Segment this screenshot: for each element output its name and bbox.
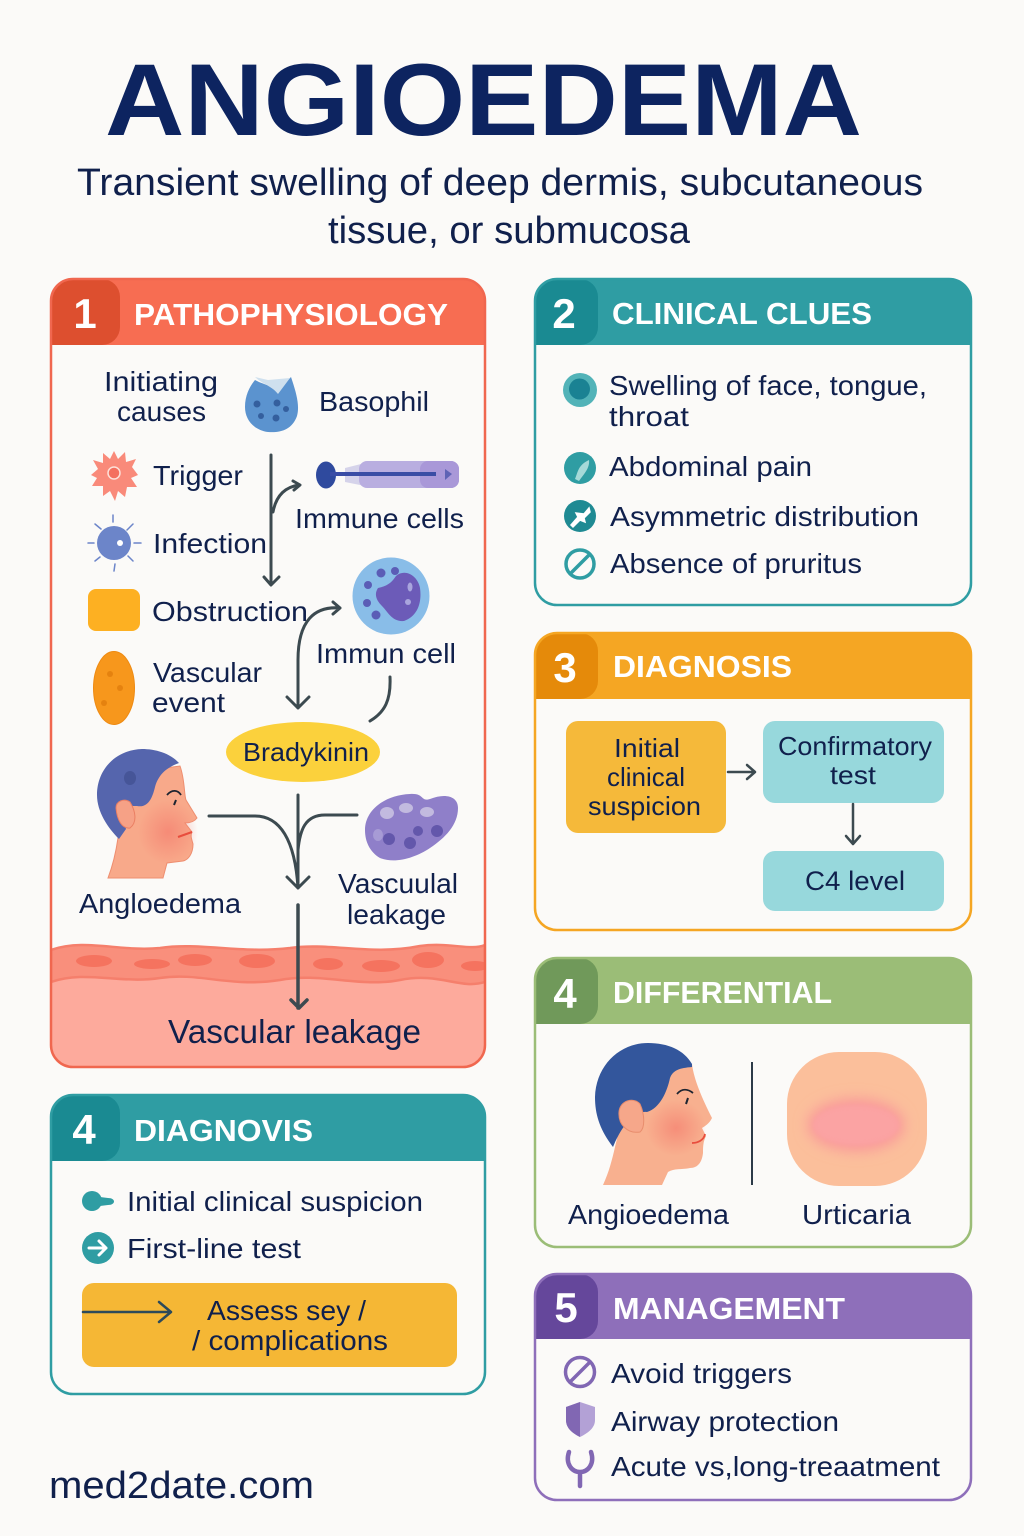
label: trigger: Trigger [153, 460, 243, 491]
label: vascular event: event [152, 687, 225, 718]
title: ANGIOEDEMA [105, 43, 862, 157]
arrow: to c4 level [846, 804, 860, 844]
label: initiating causes [104, 366, 218, 427]
arrow: to confirmatory test [728, 765, 755, 779]
subtitle [77, 162, 923, 252]
arrow: to immune cells [273, 481, 300, 512]
label: infection: Infection [153, 528, 267, 559]
icon: basophil [245, 377, 298, 432]
icon: swelling [563, 373, 597, 407]
label: vascuulal leakage: leakage [347, 899, 446, 930]
panel heading: DIFFERENTIAL [613, 975, 832, 1010]
box: initial clinical suspicion [566, 721, 726, 833]
panel heading: CLINICAL CLUES [612, 296, 872, 331]
clue: abdominal pain: Abdominal pain [609, 451, 812, 482]
clue: absence of pruritus: Absence of pruritus [610, 548, 862, 579]
box: confirmatory test: Confirmatory [778, 731, 932, 761]
panel: diagnosis flow [515, 633, 971, 930]
clue: swelling: Swelling of face, tongue, [609, 370, 927, 401]
label: initiating causes: Initiating [104, 366, 218, 397]
icon: avoid [566, 1358, 594, 1386]
clue: swelling: throat [609, 401, 689, 432]
label: urticaria: Urticaria [802, 1199, 911, 1230]
icon: vascular event [94, 652, 134, 724]
bradykinin [226, 722, 380, 782]
icon: airway [568, 1452, 592, 1486]
box: confirmatory test: test [830, 760, 877, 790]
panel: clinical clues [515, 279, 971, 605]
panel number: 1 [73, 290, 97, 337]
box: initial clinical suspicion: clinical [607, 762, 685, 792]
icon: angioedema profile [595, 1043, 712, 1185]
box: c4 level [763, 851, 944, 911]
footer: website: med2date.com [49, 1465, 314, 1507]
panel number: 5 [554, 1284, 578, 1331]
icon: immune cell syringe [316, 461, 459, 488]
icon: absence of pruritus [566, 550, 594, 578]
arrow: to immun cell and bradykinin [287, 602, 340, 708]
box: assess severity: / complications [192, 1325, 388, 1356]
panel number: 4 [72, 1106, 96, 1153]
panel number: 4 [553, 970, 577, 1017]
box: confirmatory test [763, 721, 944, 803]
panel heading: MANAGEMENT [613, 1291, 845, 1326]
label: vascuulal leakage: Vascuulal [338, 868, 458, 899]
divider [751, 1062, 753, 1185]
icon: immune cell [352, 558, 430, 634]
label: initiating causes: causes [117, 396, 206, 427]
arrow: immun cell to bradykinin [370, 677, 390, 721]
item: initial clinical suspicion: Initial clinical suspicion [127, 1186, 423, 1217]
label: vascuulal leakage [338, 868, 458, 930]
label: obstruction: Obstruction [152, 596, 308, 627]
label: immune cells: Immune cells [295, 503, 464, 534]
icon: urticaria skin [787, 1052, 927, 1186]
icon: asymmetric distribution [564, 500, 596, 532]
panel heading: PATHOPHYSIOLOGY [134, 297, 448, 332]
label: basophil: Basophil [319, 386, 429, 417]
box: initial clinical suspicion: Initial [614, 733, 680, 763]
label: vascular event: Vascular [153, 657, 262, 688]
panel number: 3 [553, 644, 577, 691]
icon: first-line test [82, 1232, 114, 1264]
label: immun cell: Immun cell [316, 638, 456, 669]
icon: trigger [91, 451, 138, 501]
box: assess severity: Assess sey / [207, 1295, 366, 1326]
icon: abdominal pain [564, 452, 596, 484]
icon: suspicion [82, 1191, 114, 1211]
clue: swelling [609, 370, 927, 432]
panel heading: DIAGNOSIS [613, 649, 792, 684]
subtitle: tissue, or submucosa [328, 210, 691, 252]
label: vascular event [152, 657, 262, 718]
panel: pathophysiology [30, 279, 489, 1067]
arrow: merging flow [209, 795, 357, 888]
label: angioedema: Angioedema [568, 1199, 729, 1230]
clue: asymmetric distribution: Asymmetric distribution [610, 501, 919, 532]
icon: shield [566, 1402, 595, 1437]
subtitle: Transient swelling of deep dermis, subcutaneous [77, 162, 923, 204]
item: acute vs long treatment: Acute vs,long-treaatment [611, 1451, 940, 1482]
arrow: trigger to obstruction [264, 455, 279, 585]
box: assess severity [82, 1283, 457, 1367]
label: angloedema: Angloedema [79, 888, 241, 919]
label: vascular leakage: Vascular leakage [168, 1013, 421, 1050]
icon: head with angioedema [97, 749, 198, 878]
panel: management [515, 1274, 971, 1500]
panel: differential [515, 958, 971, 1247]
icon: obstruction [88, 589, 140, 631]
panel number: 2 [552, 290, 576, 337]
icon: mast cell [365, 794, 458, 860]
panel: diagnosis checklist [30, 1095, 485, 1394]
icon: infection [88, 515, 141, 571]
box: initial clinical suspicion: suspicion [588, 791, 701, 821]
item: airway protection: Airway protection [611, 1406, 839, 1437]
item: first-line test: First-line test [127, 1233, 301, 1264]
item: avoid triggers: Avoid triggers [611, 1358, 792, 1389]
arrow: to vascular leakage [291, 905, 307, 1008]
box: c4 level: C4 level [805, 866, 905, 896]
panel heading: DIAGNOVIS [134, 1113, 313, 1148]
bradykinin: Bradykinin [243, 737, 369, 767]
